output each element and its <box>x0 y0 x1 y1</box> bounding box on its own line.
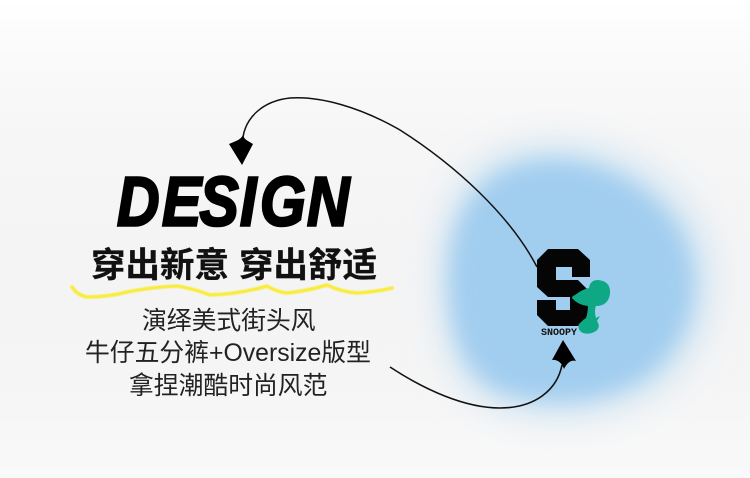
subheading: 穿出新意 <box>91 247 229 285</box>
subheading: 穿出舒适 <box>239 247 377 285</box>
logo: Snoopy S <box>537 249 610 339</box>
curved arrow to heading <box>229 98 537 267</box>
body text: 拿捏潮酷时尚风范 <box>129 372 327 400</box>
title: DESIGN: DESIGN <box>117 162 351 241</box>
body text: 牛仔五分裤+Oversize版型 <box>85 339 371 367</box>
yellow wavy underline <box>72 285 392 297</box>
SNOOPY label: SNOOPY <box>541 328 577 339</box>
letter S <box>537 249 590 326</box>
blue glow circle <box>440 144 711 416</box>
Snoopy silhouette <box>572 280 610 334</box>
subheading <box>91 247 377 285</box>
curved arrow to logo <box>390 340 576 408</box>
body text <box>85 307 371 400</box>
body text: 演绎美式街头风 <box>142 307 316 335</box>
